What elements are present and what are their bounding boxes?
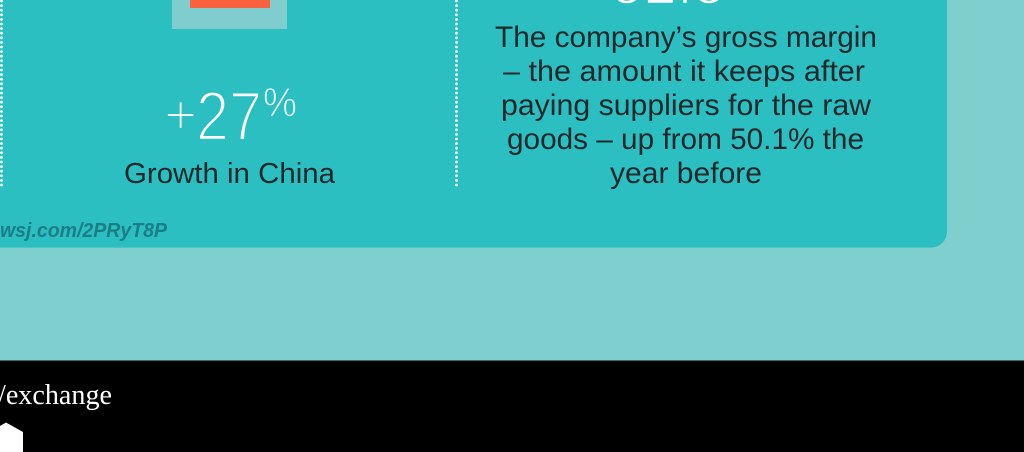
label: Growth in China: Growth in China: [124, 158, 336, 190]
stat: +27%: 27: [196, 77, 262, 155]
text block: gross margin description: year before: [610, 157, 762, 190]
page background: [0, 0, 1024, 361]
text block: gross margin description: [495, 21, 877, 190]
source link: wsj.com/2PRyT8P: [0, 220, 168, 242]
footer wordmark: /exchange: /exchange: [0, 380, 112, 411]
icon: white logo mark: [0, 422, 23, 452]
text block: gross margin description: The company’s gross margin: [495, 21, 877, 54]
icon: square with orange block: [172, 0, 287, 29]
text block: gross margin description: – the amount it keeps after: [503, 55, 865, 88]
panel: teal stats card: [0, 0, 947, 248]
text block: gross margin description: goods – up from 50.1% the: [507, 123, 864, 156]
stat: +27%: %: [263, 80, 297, 126]
stat: +27%: +: [164, 83, 197, 147]
text block: gross margin description: paying suppliers for the raw: [501, 89, 871, 122]
footer bar: [0, 360, 1024, 452]
stat: +27%: [164, 77, 297, 155]
